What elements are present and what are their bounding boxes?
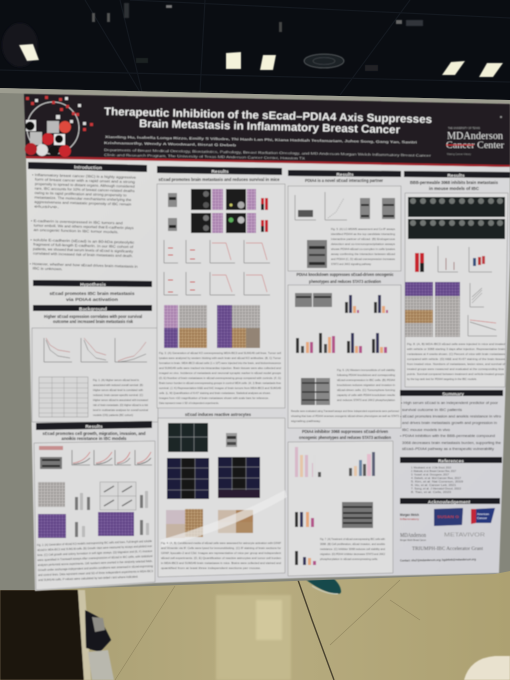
figure 7 caption: Fig. 7. (A) Treatment of sEcad-overexpressing IBC cells with [320,537,385,541]
figure 6 caption [291,368,399,423]
figure 2 caption: analyses performed across experiments. Cell numbers were counted in five randomly selected fields. [38,559,153,567]
authors and affiliations: Clinic and Research Program, The University of Texas MD Anderson Cancer Center, Houston TX [104,153,306,161]
sponsor logos: SUSAN G [437,514,459,519]
bar charts [295,512,316,565]
figure 5 caption: identified PDIA4 as the top candidate interacting [331,232,395,236]
figure 2 caption: Fig. 2. (A) Generation of sEcad KO models overexpressing IBC cells and lines. Full-length and soluble [37,539,152,547]
ceiling background [0,0,510,110]
sponsor logos: Morgan Welch [400,513,419,517]
figure 6 caption: following PDIA4 knockdown and corresponding [337,373,395,377]
introduction text: elusive. [34,205,59,209]
introduction text: IBC is unknown. [33,267,63,271]
summary heading: Summary [442,392,464,398]
western blots [307,198,395,268]
introduction text: • However, whether and how sEcad drives brain metastasis in [30,262,138,269]
introduction text: owing to its rapid proliferation and strong propensity to [35,191,127,197]
column 2: results [157,166,287,577]
title: Brain Metastasis in Inflammatory Breast Cancer [139,118,401,136]
migration images [38,482,136,510]
migration bars [75,491,148,510]
figure 4 caption: GFAP, lipocalin-2 and C3d. Images are representative of mice per group and independent [161,551,281,555]
figure 4 caption: in MDA-IBC3 and SUM149 brain metastases in mice. Brains were collected and stained and [161,561,281,565]
immunofluorescence panel A [168,423,208,452]
figure 3 caption: imaged ex vivo. Incidence of metastasis and neuronal synaptic marker in sEcad model groups [159,371,282,375]
results heading [404,171,510,179]
knockdown subheading [296,272,394,284]
figure 8 caption: points. Survival compared between treatment and vehicle-treated groups [407,372,505,376]
reference list: 2. Matsuda, et al. Breast Cancer Res, 2017 [411,469,456,473]
background figure panel [32,328,158,422]
inhibitor subheading: PDIA4 inhibitor 3068 suppresses sEcad-driven [302,429,388,434]
results subheading [410,180,499,191]
western blots [295,293,332,307]
figure 2 caption: were quantified in Transwell assays after overexpression of sEcad in IBC cells, with statistical [37,554,153,562]
growth curves [72,450,152,465]
figure 5 caption: shows PDIA4-sEcad co-complex in cells lysates [331,247,396,251]
figure 6 caption: showing that loss of PDIA4 reverses oncogenic sEcad-driven phenotypes as well as STAT3 [291,414,399,418]
reference list: 8. Tian, et al. Cells, 2023 [411,490,451,494]
introduction text: metastasize. The molecular mechanisms underlying the [34,196,131,202]
contact emails: Contact: xhu7@mdanderson.org; bgdebeb@mdanderson.org [400,557,476,562]
grant name: TRIUMPH-IBC Accelerator Grant [412,547,484,552]
IHC images [160,490,287,547]
scatter plots and survival curves [164,240,270,295]
authors and affiliations: Krishnamurthy, Wendy A Woodward, Bisrat G Debeb [104,141,236,147]
sponsor logos: Cancer [477,516,488,520]
dark cabinet and bag [0,590,114,680]
figure 2 caption: sEcad in MDA-IBC3 and SUM149 cells. (B) Growth rates were measured by assays and plotted over [37,544,152,552]
figure 7 caption: 3068. (B) Cell proliferation, sEcad invasion, and anoikis [320,542,386,546]
summary text: • sEcad promotes invasion and anoikis resistance in vitro [400,414,502,418]
results subheading: sEcad promotes cell growth, migration, invasion, and [42,431,146,436]
introduction text: • E-cadherin is overexpressed in IBC tumors and [31,219,123,225]
hypothesis statement: sEcad promotes IBC brain metastasis [50,291,135,296]
summary text: survival outcome in IBC patients [402,407,462,412]
knockdown subheading: phenotypes and reduces STAT3 activation [309,279,381,284]
acknowledgement heading: Acknowledgement [428,500,471,506]
background [32,305,158,422]
paired plot and survival curve [468,283,497,336]
figure 8 caption: treated groups were measured and evaluated at the corresponding time [407,367,504,371]
survival curves [44,338,147,362]
figure 4 caption [161,541,281,570]
figure 6 caption: capacity of cells with PDIA4 knockdown results [337,393,396,397]
histology images [164,305,260,348]
column 1: introduction [28,162,147,273]
MD Anderson logo: THE UNIVERSITY OF TEXAS [448,126,480,130]
figure 5 caption: interactive partner of sEcad. (B) Endogenous [331,237,396,241]
reactive astrocytes subheading: sEcad induces reactive astrocytes [185,412,252,417]
floor [0,565,510,680]
figure 8 caption: Fig. 8. (A, B) MDA-IBC3 sEcad cells were injected in mice and treated [407,342,505,346]
figure 4 caption: and Vimentin via IF. Cells were lysed for immunoblotting. (C) IF staining of brain sections for [161,546,281,550]
results subheading: anoikis resistance in IBC models [62,436,127,441]
figure 3 caption: lysates were analyzed by western blotting with each brain and sEcad KO antibodies. (B, C) Tumor [159,356,281,360]
reference list [411,466,463,494]
authors and affiliations: Departments of Breast Medical Oncology, Biostatistics, Pathology, Breast Radiation Oncology, and MD Anderson Morgan Welch Inflammatory Breast Cancer [104,148,432,158]
results heading [157,166,282,175]
figure 7 caption [320,537,386,561]
background subheading: outcome and increased brain metastasis risk [53,319,134,324]
results subheading [42,431,146,441]
introduction text: correlated with increased risk of brain metastasis and death. [33,252,133,258]
brain imaging [408,197,505,239]
acknowledgement [400,498,500,562]
figure 6 caption: sEcad-driven cells. (C) Tumorsphere-forming [337,388,395,392]
summary text [400,400,502,451]
hypothesis [33,280,152,302]
inhibitor subheading: oncogenic phenotypes and reduces STAT3 activation [299,435,391,440]
reference list: 4. Debeb, et al. Mol Cancer Res, 2017 [411,476,461,480]
figure 6 caption: knockdown reduces migration and invasion in [337,383,395,387]
figure 3 caption: Brain tumor burden in sEcad-overexpressing groups in control MDA cells. (H, I) Brain metastasis-free [159,381,281,385]
figure 3 caption: and SUM149 cells were tracked via intracardiac injection. Brain tissues were also collected and [159,366,281,370]
brain metastasis figure panel [405,193,508,387]
bar charts [296,295,388,353]
summary text: and drives brain metastasis growth and progression in [402,420,497,425]
column 4: results [400,171,510,562]
inhibitor figure panel [288,441,393,576]
column 1: results [34,421,155,590]
figure 7 caption: phosphorylation in sEcad-overexpressing cells. [320,557,378,561]
figure 6 caption: sEcad-overexpression in IBC cells. (B) PDIA4 [337,378,395,382]
reference list: 5. Kim, et al. Nat Commun, 2019 [411,480,463,484]
invasion images [38,512,149,538]
figure 1 caption: Higher serum sEcad is associated with increased [93,398,148,402]
figure 3 caption: survival. (J, K) Representative H&E and IHC images of brain tumors from MDA-IBC3 and SUM149 [159,386,281,390]
figure 3 caption: cells. (L, M) Quantification of Ki-67 staining and brain metastases. Statistical analyses as shown. [159,391,271,395]
results subheading: PDIA4 is a novel sEcad interacting partner [305,178,383,183]
introduction text: aggressiveness and metastatic propensity of IBC remain [34,200,131,207]
dot plots [295,192,347,220]
figure 6 caption: and reduces STAT3 and JAK2 phosphorylation [337,398,395,402]
introduction heading: Introduction [74,165,102,171]
summary text: sEcad–PDIA4 pathway as a therapeutic vulnerability [402,446,494,451]
figure 1 caption: level in multivariate analyses for overall survival [93,408,148,412]
references heading: References [438,458,464,464]
figure 2 caption: time. (C) Cell growth and colony formation in soft agar assays. (D) Migration and (E, F) invasion [37,549,153,557]
column 3: results [288,170,401,576]
title: Therapeutic Inhibition of the sEcad–PDIA4 Axis Suppresses [104,106,432,126]
sponsor logos [400,508,495,542]
background subheading: Higher sEcad expression correlates with poor survival [44,314,142,319]
header banner [24,94,510,167]
results figure panel [34,441,155,590]
figure 1 caption: models (OS) patients (BC cohort) [93,413,133,417]
reference list: 3. Yousef, et al. Oncogene, 2017 [411,472,449,476]
sponsor logos: American [477,512,489,516]
figure 2 caption: and control lines. Data represent mean and SD of three independent experiments in MDA-IBC3 [38,569,153,577]
exhibit board [0,88,510,590]
figure 4 caption: sEcad cell experiments. (D, E) Quantification of reactive astrocytes and tumor cell burden [161,556,281,560]
figure 8 caption: from treated mice. Numbers of metastases, lesion sizes, and survival of [407,362,505,366]
figure 1 caption: Higher serum sEcad level is correlated with [93,388,143,392]
figure 3 caption: formation in brain. MDA-IBC3 sEcad cells (1 x 10⁵) were injected into the brain, and bioluminescence [159,361,281,365]
results heading: Results [85,424,103,430]
figure 8 caption: with vehicle or 3068 starting 3 days after injection. Representative brain [407,347,505,351]
title [104,106,432,136]
figure 5 caption: assay confirming the interaction between sEcad [331,252,395,256]
inhibitor subheading [299,429,391,440]
figure 2 caption [37,539,154,582]
summary text: IBC mouse models in vivo [402,427,451,432]
MD Anderson logo: Making Cancer History [447,152,472,156]
results heading [36,421,152,430]
introduction text: propensity to spread to distant organs. Although considered [35,182,135,189]
introduction text: • soluble E-cadherin (sEcad) is an 80-kDa proteolytic [30,238,135,245]
results subheading: BBB-permeable 3068 inhibits brain metastasis [410,180,499,185]
MD Anderson logo: Cancer Center [446,141,505,151]
introduction text: patients, we showed that serum levels of sEcad is significantly [33,247,133,254]
reactive astrocytes figure panel [158,418,287,577]
results heading: Results [447,173,465,179]
summary text: • High serum sEcad is an independent predictor of poor [401,400,499,405]
interacting partner figure panel [288,186,401,271]
metastasis incidence bars [261,198,268,232]
brain metastasis figure panel [157,184,285,408]
western blots [168,193,177,231]
summary text: 3068 decreases brain metastasis burden, supporting the [402,440,502,445]
figure 2 caption: Growth under anchorage-independent and anoikis conditions was assessed in sEcad-expressing [38,564,153,572]
introduction text: tumor emboli. We and others reported that E-cadherin plays [34,224,134,230]
background subheading [44,314,142,324]
figure 3 caption [159,351,282,405]
figure 5 caption: and PDIA4 (C, D) sEcad overexpression increases [331,257,396,261]
bioluminescence images [191,189,256,233]
sponsor logos: METAVIVOR [444,532,486,538]
figure 5 caption: detection and co-immunoprecipitation assays [331,242,396,246]
sponsor logos: Inflammatory [400,517,420,521]
results heading: Results [336,172,354,178]
histology images [405,282,460,337]
figure 7 caption: resistance. (C) Inhibitor 3068 reduces cell viability and [320,547,385,551]
authors and affiliations [104,135,432,161]
figure 8 caption [407,342,506,381]
results subheading: sEcad promotes brain metastasis and reduces survival in mice [158,177,280,182]
immunofluorescence panels [167,457,260,499]
figure 1 caption [93,378,148,417]
summary text: • PDIA4 inhibition with the BBB-permeable compound [400,433,495,438]
figure 5 caption: STAT3 and JAK2 signaling pathway [331,262,371,266]
western blot [39,446,63,469]
figure 8 caption: by the log-rank test for PDIA4 targeting in the IBC models. [407,377,477,381]
figure 8 caption: metastases at 4 weeks shown. (C) Percent of mice with brain metastases [407,352,506,356]
reference list: 6. Hu, et al. Cancer Lett, 2021 [411,483,456,487]
introduction text: • Inflammatory breast cancer (IBC) is a highly aggressive [32,173,136,180]
summary [400,390,503,451]
shoe [305,578,341,594]
reference list: 7. Song, et al. J Hematol Oncol, 2022 [411,486,461,490]
patient table [39,377,88,417]
coffee cup [464,656,510,680]
figure 3 caption: Data represent mean ± SD of independent experiments. [159,401,219,405]
introduction text [30,173,140,273]
figure 3 caption: (D, E) Number of brain metastases in sEcad-overexpressing group compared with controls. (F, G) [159,376,281,380]
figure 1 caption: reduced, brain cancer-specific survival. (C) [93,393,143,397]
references [400,457,502,494]
introduction text: an oncogenic function in IBC tumor models. [34,228,119,234]
incidence bars and scatter [415,246,492,272]
authors and affiliations: Xiaoding Hu, Isabella Longa Rizzo, Emilly S Villodre, Thi Hanh Lan Phi, Kiana Haddiah Tesfamariam, Juhee Song, Gang Yan, Savitri [105,135,417,144]
hypothesis statement: via PDIA4 activation [66,297,119,302]
figure 5 caption: Fig. 5. (A) LC-MS/MS assessment and Co-IP assays [331,227,396,231]
figure 7 caption: migration. (D) PDIA4 inhibitor decreases STAT3 and JAK2 [320,552,385,556]
hypothesis heading: Hypothesis [80,282,106,288]
figure 4 caption: quantified from at least three independent sections per mouse. [161,566,261,570]
figure 8 caption: compared with vehicle. (D) H&E and Ki-67 staining of the brain tissues [407,357,506,361]
figure 6 caption: signaling pathway. [291,419,321,423]
figure 4 caption: Fig. 4. (A, B) Conditioned media of sEcad cells were assessed for astrocyte activation with GFAP [161,541,281,545]
introduction text: form of breast cancer with a rapid onset and a strong [35,178,135,184]
introduction text: rare, IBC accounts for 10% of breast cancer-related deaths [35,187,135,193]
figure 6 caption: Fig. 6. (A) Western immunoblots of cell viability [337,368,396,372]
sponsor logos: MDAnderson [400,533,426,539]
knockdown subheading: PDIA4 knockdown suppresses sEcad-driven oncogenic [296,272,394,277]
figure 2 caption: and SUM149 cells. P values were calculated by two-tailed t test where indicated. [38,574,138,582]
background heading: Background [79,306,107,312]
MD Anderson logo: MDAnderson [447,131,503,142]
western blot [342,502,373,528]
figure 1 caption: risk of brain metastasis. (D) Higher sEcad is a risk [93,403,148,407]
bar charts [295,447,375,477]
figure 6 caption: Results were evaluated using Transwell assays and three independent experiments were performed [291,409,399,413]
results heading: Results [211,169,229,175]
hypothesis statement [50,291,135,302]
figure 1 caption: associated with reduced overall survival. (B) [93,383,143,387]
logo emblem [25,96,93,157]
MD Anderson logo [446,116,505,156]
introduction text: fragment of full-length E-cadherin. In our IBC cohort of [33,243,133,249]
figure 3 caption: Images from ×10 magnification of brain metastases shown with scale bars for reference. [159,396,269,400]
reference list: 1. Woodward, et al. J Clin Oncol, 2013 [411,466,451,470]
ceiling lights [19,3,503,77]
western blots [301,378,330,405]
poster sheet [24,94,510,591]
results heading [288,170,401,178]
western blot [226,433,237,447]
sponsor logos: Morgan Welch Breast Cancer [400,538,426,542]
knockdown figure panel [288,285,401,428]
figure 1 caption: Fig. 1. (A) Higher serum sEcad level is [93,378,140,382]
figure 5 caption [331,227,396,266]
figure 3 caption: Fig. 3. (A) Generation of sEcad KO overexpressing MDA-IBC3 and SUM149 cell lines. Tumor cell [159,351,281,355]
results subheading: in mouse models of IBC [429,186,479,191]
